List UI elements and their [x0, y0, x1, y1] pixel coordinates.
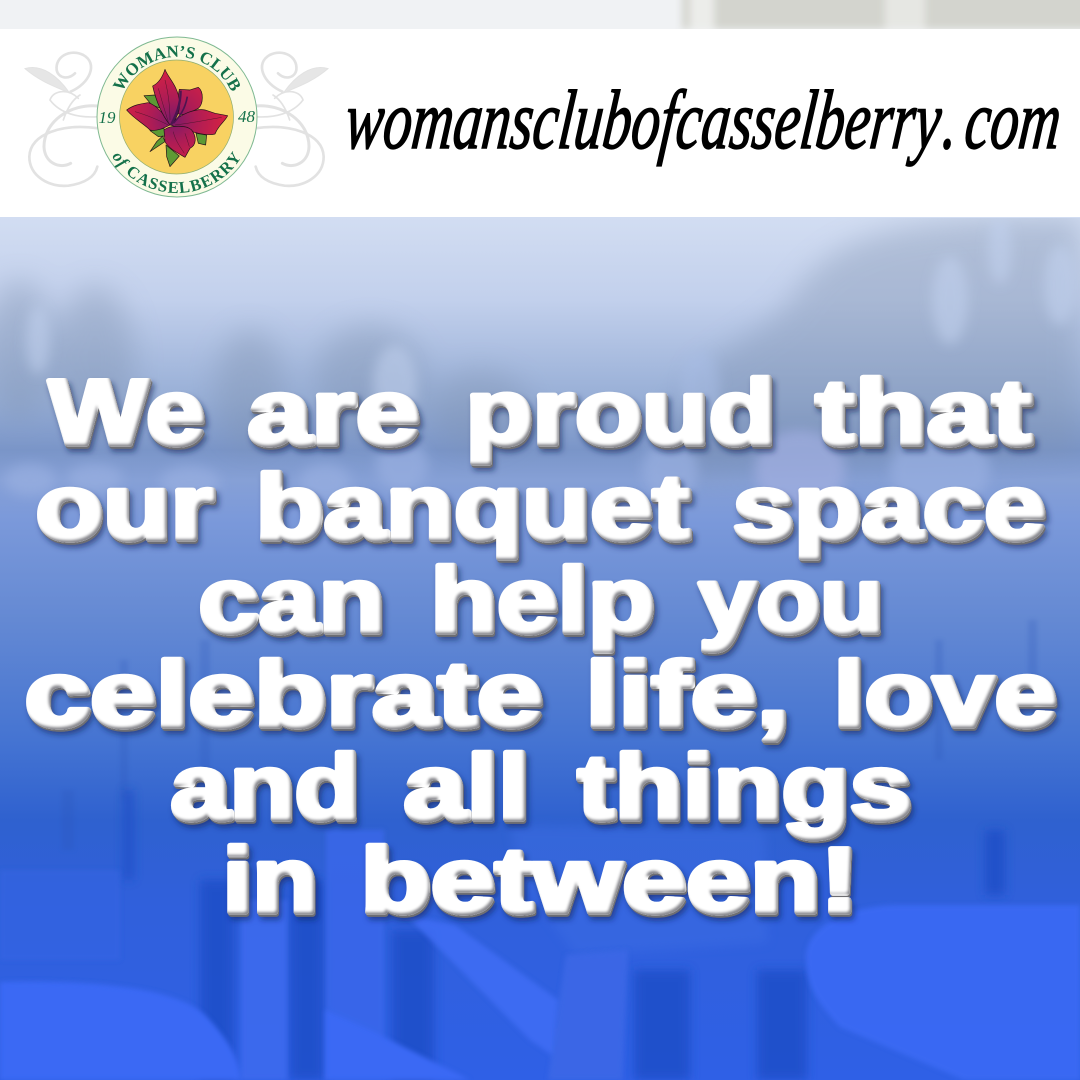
blurred tree line	[0, 217, 1080, 480]
ornament left	[25, 53, 98, 186]
logo badge: 48	[238, 107, 256, 126]
sign card	[522, 834, 752, 840]
website address: .	[939, 74, 963, 167]
chair highlights	[0, 830, 1080, 1080]
blurred light spots	[26, 216, 1076, 430]
headline: proud	[466, 362, 776, 464]
headline: celebrate	[25, 644, 543, 746]
headline: all	[404, 737, 530, 839]
icon: hibiscus flower	[127, 69, 228, 167]
headline: in	[223, 830, 318, 932]
headline: are	[248, 362, 420, 464]
headline: that	[816, 362, 1032, 464]
background photo panel	[0, 216, 1080, 1080]
headline: our	[36, 457, 214, 559]
headline: and	[171, 737, 360, 839]
headline: you	[699, 550, 884, 652]
headline: life,	[586, 644, 790, 746]
headline: help	[431, 550, 655, 652]
headline: love	[834, 644, 1057, 746]
top photo strip	[0, 0, 1080, 29]
logo badge: of CASSELBERRY	[112, 151, 240, 194]
chair shadows	[124, 790, 1005, 1080]
headline: between!	[361, 830, 859, 932]
logo badge: 19	[98, 108, 116, 127]
logo badge: WOMAN’S CLUB	[112, 46, 240, 91]
headline: things	[578, 737, 912, 839]
logo badge	[96, 36, 258, 198]
faint slats in mid section	[122, 621, 1036, 678]
headline	[25, 362, 1057, 932]
chair tops	[4, 430, 990, 510]
header band	[0, 29, 1080, 217]
ornament right	[255, 53, 328, 186]
headline: space	[733, 457, 1046, 559]
headline: banquet	[256, 457, 690, 559]
headline: can	[199, 550, 385, 652]
headline: We	[49, 362, 205, 464]
